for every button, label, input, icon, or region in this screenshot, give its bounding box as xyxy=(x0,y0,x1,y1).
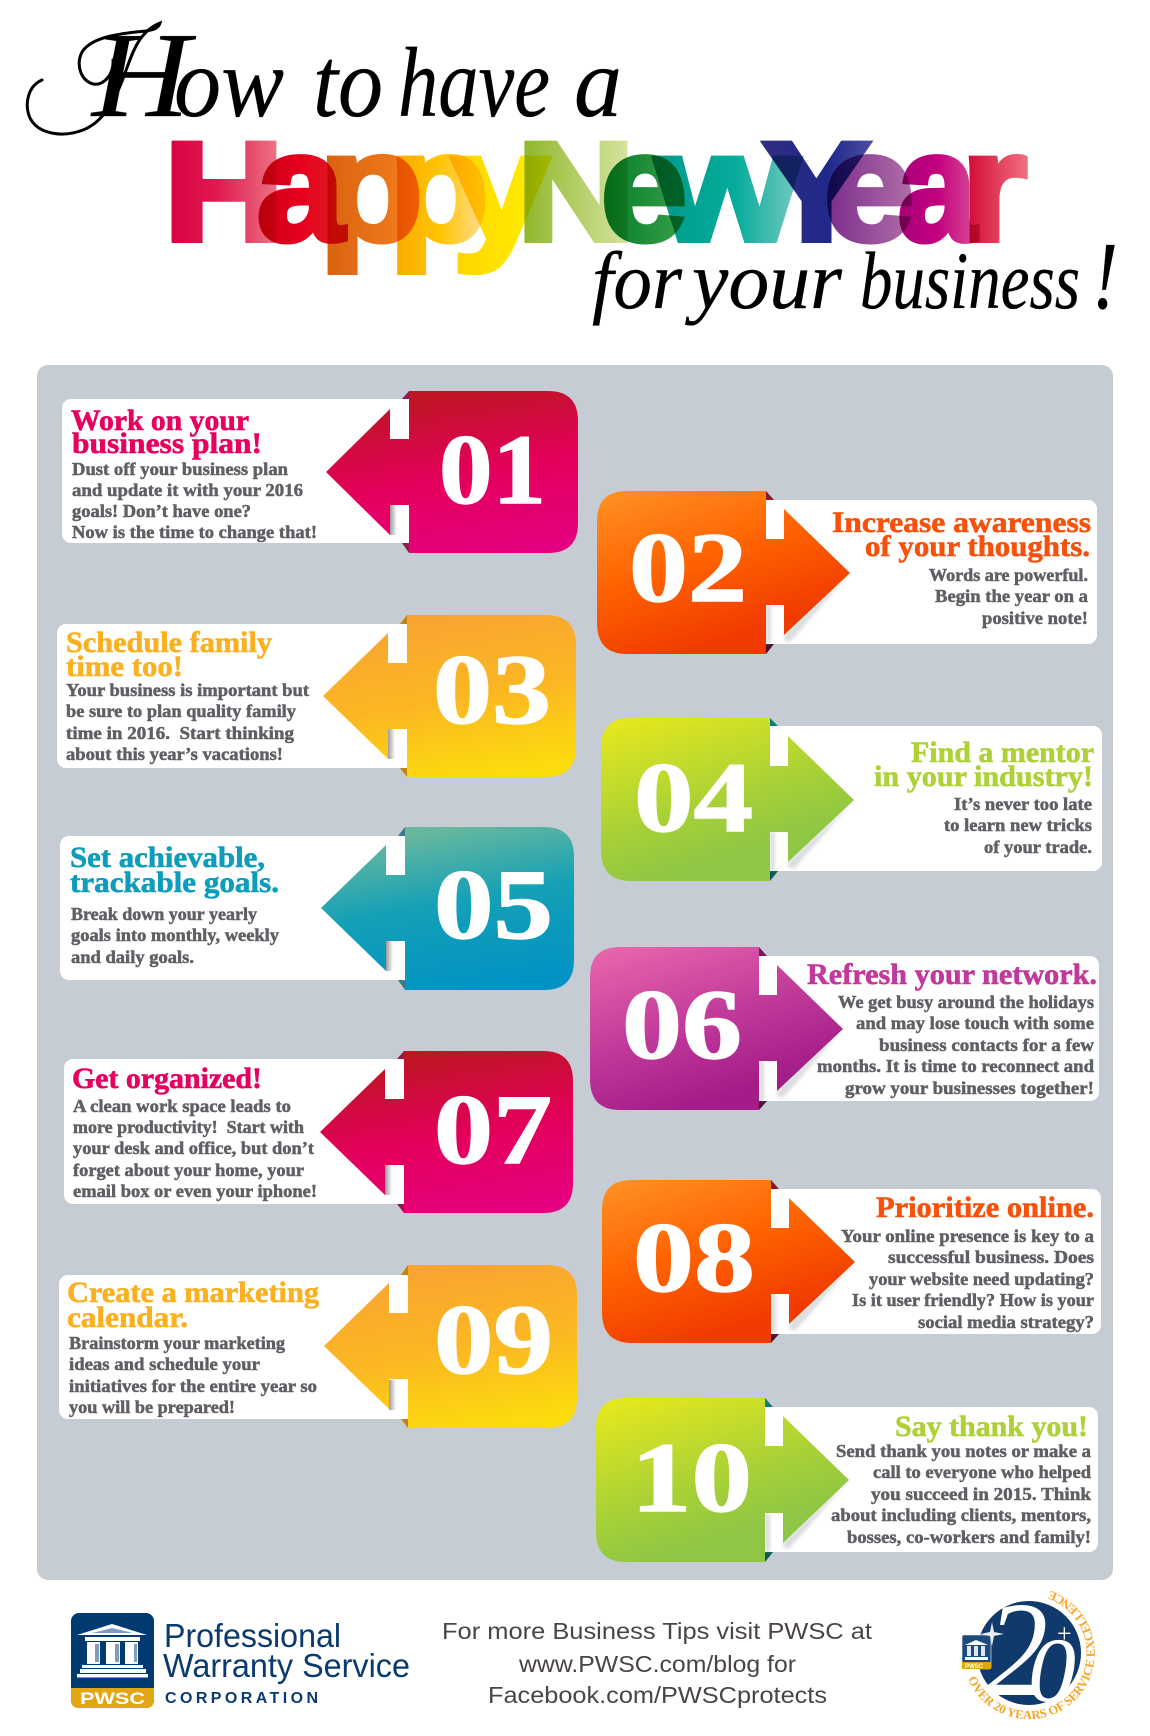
body text: your desk and office, but don’t xyxy=(73,1138,314,1158)
body text: ideas and schedule your xyxy=(69,1354,260,1374)
body text: and may lose touch with some xyxy=(856,1013,1094,1033)
script line: How to have a: to xyxy=(313,27,383,138)
body text: goals into monthly, weekly xyxy=(71,925,279,945)
body text: It’s never too late xyxy=(954,794,1092,814)
heading: Refresh your network. xyxy=(807,958,1097,991)
company name: CORPORATION xyxy=(165,1690,318,1707)
heading xyxy=(66,626,272,683)
heading xyxy=(874,736,1094,793)
number tab with arrow xyxy=(596,1398,849,1562)
card 10: Say thank you xyxy=(596,1398,1098,1562)
body text: of your trade. xyxy=(984,837,1092,857)
body text: bosses, co-workers and family! xyxy=(847,1527,1091,1547)
folds xyxy=(400,615,407,777)
arrow shadow xyxy=(770,800,854,871)
folds xyxy=(402,391,409,553)
number tab with arrow xyxy=(601,718,854,881)
company name: Professional xyxy=(164,1617,341,1654)
body text: Is it user friendly? How is your xyxy=(852,1290,1094,1310)
folds xyxy=(398,827,405,990)
heading xyxy=(832,506,1091,563)
script line: for your business!: for xyxy=(592,235,683,326)
body text xyxy=(841,1226,1094,1332)
body text xyxy=(817,992,1094,1098)
colourful wordmark: Happy New Year: p xyxy=(389,101,489,273)
folds xyxy=(770,718,778,726)
title: How to have a Happy New Year for your business! xyxy=(27,8,1118,329)
number: 04 xyxy=(634,742,753,853)
colourful wordmark: Happy New Year: N xyxy=(517,113,635,270)
card 04: Find a mentor in your industry xyxy=(601,718,1102,881)
body text: email box or even your iphone! xyxy=(73,1181,317,1201)
heading: Increase awareness xyxy=(832,506,1091,539)
body text xyxy=(944,794,1092,857)
number tab with arrow xyxy=(320,1051,573,1213)
folds xyxy=(759,947,767,956)
badge: over 20 years of service excellence xyxy=(962,1575,1095,1725)
colourful wordmark: Happy New Year: w xyxy=(655,101,800,273)
body text: and update it with your 2016 xyxy=(72,480,303,500)
body text: Now is the time to change that! xyxy=(72,522,317,542)
body text: forget about your home, your xyxy=(73,1160,304,1180)
curved slogan: OVER 20 YEARS OF SERVICE EXCELLENCE xyxy=(969,1590,1095,1720)
script line: How to have a: ow xyxy=(174,27,284,138)
heading: Create a marketing xyxy=(67,1276,319,1309)
body text: We get busy around the holidays xyxy=(838,992,1094,1012)
body text: Words are powerful. xyxy=(929,565,1088,585)
sparkle xyxy=(980,1622,1004,1646)
arrow shadow xyxy=(771,1262,855,1334)
script line: How to have a: H xyxy=(90,8,197,143)
card 06: Refresh your network xyxy=(590,947,1099,1110)
number: 05 xyxy=(434,849,553,960)
body text: Your online presence is key to a xyxy=(841,1226,1094,1246)
folds xyxy=(771,1180,779,1189)
card body xyxy=(751,1189,1101,1334)
body text: about including clients, mentors, xyxy=(831,1505,1091,1525)
body text: grow your businesses together! xyxy=(845,1078,1094,1098)
body text xyxy=(66,680,309,764)
heading: in your industry! xyxy=(874,760,1093,793)
heading: Prioritize online. xyxy=(876,1191,1094,1224)
notch shadow xyxy=(388,729,395,759)
heading: time too! xyxy=(66,650,183,683)
colourful wordmark: Happy New Year: e xyxy=(824,101,914,273)
body text: Brainstorm your marketing xyxy=(69,1333,285,1353)
heading: Get organized! xyxy=(72,1062,262,1095)
body text: Break down your yearly xyxy=(71,904,257,924)
number: 09 xyxy=(434,1284,553,1395)
body text: call to everyone who helped xyxy=(873,1462,1091,1482)
colourful wordmark: Happy New Year: Y xyxy=(763,113,870,270)
body text: social media strategy? xyxy=(918,1312,1094,1332)
notch shadow xyxy=(385,1165,392,1195)
icon: PWSC temple xyxy=(71,1613,154,1708)
number tab with arrow xyxy=(326,391,578,553)
heading: Work on your xyxy=(71,404,249,437)
card body xyxy=(60,836,425,980)
company name xyxy=(163,1617,410,1707)
colourful wordmark: Happy New Year: y xyxy=(452,101,549,273)
body text: you succeed in 2015. Think xyxy=(871,1484,1091,1504)
heading: Find a mentor xyxy=(911,736,1094,769)
panel: ten tips background xyxy=(37,365,1113,1580)
body text xyxy=(69,1333,317,1417)
colourful wordmark: Happy New Year: a xyxy=(257,101,345,273)
card 08: Prioritize online xyxy=(602,1180,1101,1343)
logo: Professional Warranty Service Corporation xyxy=(71,1613,410,1708)
number: 08 xyxy=(633,1202,755,1313)
arrow shadow xyxy=(765,1480,849,1552)
arrow shadow xyxy=(766,573,850,644)
number: 01 xyxy=(439,414,546,525)
body text xyxy=(72,459,317,542)
body text: Your business is important but xyxy=(66,680,309,700)
footer call to action: www.PWSC.com/blog for xyxy=(518,1651,796,1677)
numeral 20+: 2 xyxy=(986,1575,1048,1725)
body text xyxy=(71,904,279,967)
body text: and daily goals. xyxy=(71,947,194,967)
card 07: Get organized xyxy=(64,1051,573,1213)
heading xyxy=(67,1276,319,1334)
script line: for your business!: your xyxy=(685,235,843,326)
body text: to learn new tricks xyxy=(944,815,1092,835)
colourful wordmark: Happy New Year: p xyxy=(319,101,423,273)
card 01: Work on your business plan xyxy=(62,391,578,553)
card 09: Create a marketing calendar xyxy=(59,1265,577,1428)
number: 02 xyxy=(629,512,747,623)
small PWSC icon: PWSC xyxy=(965,1664,984,1670)
heading: of your thoughts. xyxy=(865,530,1090,563)
card body xyxy=(62,399,429,543)
heading: Schedule family xyxy=(66,626,272,659)
heading: Say thank you! xyxy=(895,1410,1088,1443)
number tab with arrow xyxy=(323,615,576,777)
script line: How to have a xyxy=(27,8,622,143)
folds xyxy=(766,491,774,500)
body text: A clean work space leads to xyxy=(73,1096,291,1116)
body text: business contacts for a few xyxy=(879,1035,1094,1055)
body text: more productivity! Start with xyxy=(73,1117,304,1137)
body text: you will be prepared! xyxy=(69,1397,235,1417)
script line: How to have a: a xyxy=(574,27,622,138)
heading: trackable goals. xyxy=(70,866,279,899)
number tab with arrow xyxy=(324,1265,577,1428)
colourful wordmark: Happy New Year: r xyxy=(961,101,1027,273)
small PWSC icon xyxy=(962,1635,991,1670)
card body xyxy=(745,1407,1098,1552)
script line: How to have a: have xyxy=(398,27,550,138)
body text: successful business. Does xyxy=(888,1247,1094,1267)
arrow shadow xyxy=(759,1029,843,1101)
company name: Warranty Service xyxy=(163,1647,410,1684)
card body xyxy=(57,624,427,768)
body text: goals! Don’t have one? xyxy=(72,501,251,521)
numeral 20+: 0 xyxy=(1028,1619,1076,1721)
number: 03 xyxy=(433,634,551,745)
folds xyxy=(401,1265,408,1428)
card body xyxy=(64,1059,424,1204)
card 02: Increase awareness of your thoughts xyxy=(597,491,1097,654)
body text: positive note! xyxy=(982,608,1088,628)
body text xyxy=(831,1441,1091,1547)
body text: time in 2016. Start thinking xyxy=(66,723,294,743)
body text: about this year’s vacations! xyxy=(66,744,283,764)
script line: for your business!: ! xyxy=(1092,222,1118,329)
colourful wordmark: Happy New Year: e xyxy=(601,101,687,273)
number tab with arrow xyxy=(321,827,574,990)
body text xyxy=(73,1096,317,1201)
folds xyxy=(765,1398,773,1407)
card body xyxy=(746,500,1097,644)
card 05: Set achievable, trackable goals xyxy=(60,827,574,990)
body text: be sure to plan quality family xyxy=(66,701,296,721)
card body xyxy=(59,1275,428,1419)
notch shadow xyxy=(389,1380,396,1410)
body text xyxy=(929,565,1088,628)
notch shadow xyxy=(390,505,397,535)
body text: Begin the year on a xyxy=(935,586,1088,606)
heading xyxy=(71,404,262,460)
body text: Dust off your business plan xyxy=(72,459,288,479)
heading: business plan! xyxy=(72,427,262,460)
body text: Send thank you notes or make a xyxy=(836,1441,1091,1461)
body text: months. It is time to reconnect and xyxy=(817,1056,1094,1076)
body text: initiatives for the entire year so xyxy=(69,1376,317,1396)
footer call to action: Facebook.com/PWSCprotects xyxy=(488,1682,827,1708)
number: 10 xyxy=(631,1422,752,1533)
script line: for your business!: business xyxy=(860,235,1080,326)
notch shadow xyxy=(386,941,393,971)
card 03: Schedule family time too xyxy=(57,615,576,777)
footer call to action xyxy=(442,1618,873,1708)
icon: PWSC temple: PWSC xyxy=(80,1690,145,1708)
numeral 20+: + xyxy=(1057,1619,1072,1648)
folds xyxy=(397,1051,404,1213)
colourful wordmark: Happy New Year: a xyxy=(898,101,977,273)
number tab with arrow xyxy=(590,947,843,1110)
heading xyxy=(70,841,279,899)
colourful wordmark: Happy New Year: H xyxy=(164,113,284,270)
colourful wordmark: Happy New Year xyxy=(164,101,1027,273)
footer call to action: For more Business Tips visit PWSC at xyxy=(442,1618,873,1644)
heading: calendar. xyxy=(67,1301,188,1334)
number tab with arrow xyxy=(602,1180,855,1343)
card body xyxy=(750,726,1102,871)
script line: for your business! xyxy=(592,222,1118,329)
badge circle xyxy=(977,1601,1081,1705)
body text: your website need updating? xyxy=(869,1269,1094,1289)
card body xyxy=(739,956,1099,1101)
number: 07 xyxy=(434,1074,552,1185)
heading: Set achievable, xyxy=(70,841,265,874)
number tab with arrow xyxy=(597,491,850,654)
number: 06 xyxy=(622,969,742,1080)
